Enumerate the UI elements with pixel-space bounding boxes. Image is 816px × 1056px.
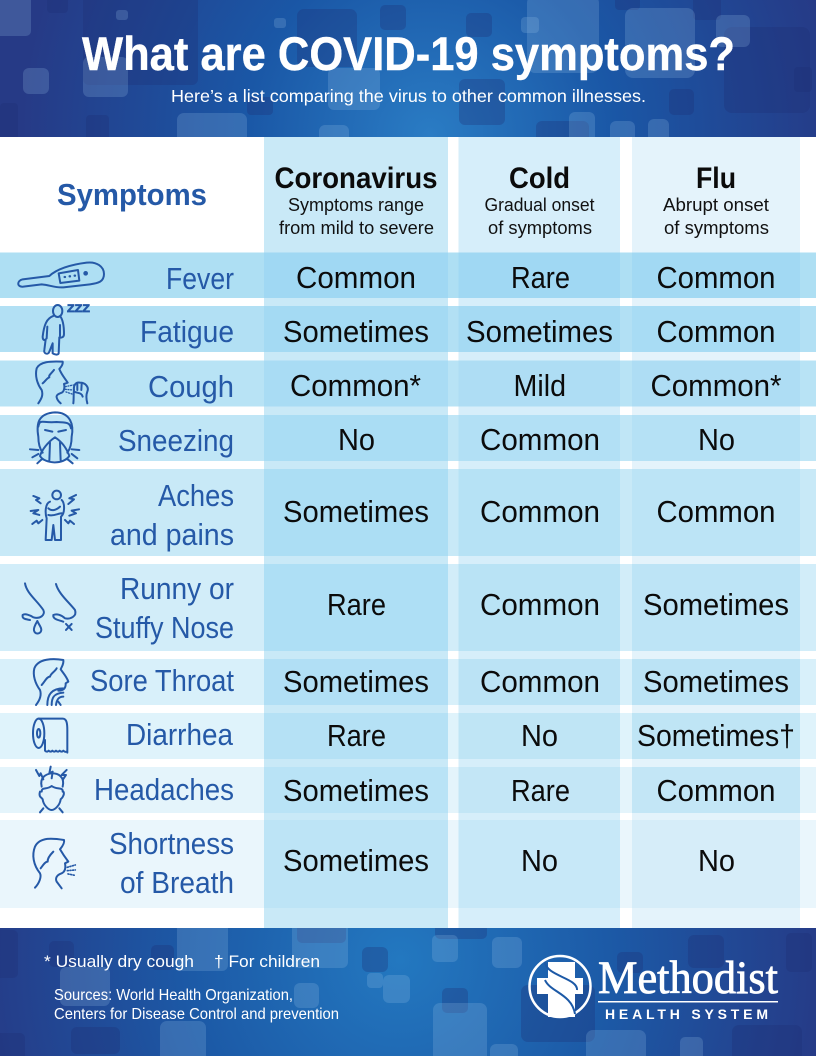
row: Shortness of Breath xyxy=(0,820,816,908)
panel: table header row xyxy=(57,137,800,928)
sources: Sources: World Health Organization, xyxy=(54,987,293,1004)
values: Sneezing: No xyxy=(698,422,735,457)
values: Sneezing: No xyxy=(338,422,375,457)
heading: Flu: of symptoms xyxy=(664,218,769,238)
heading: Flu: Flu xyxy=(696,162,736,195)
row: Fever xyxy=(0,252,816,298)
icon: throat xyxy=(34,659,68,705)
values: Headaches xyxy=(283,773,776,808)
values: Fever: Common xyxy=(656,260,776,295)
values: Shortness of Breath: Sometimes xyxy=(283,843,429,878)
values: Cough: Mild xyxy=(514,368,566,403)
values: Sore Throat xyxy=(283,664,789,699)
label: Shortness of Breath: Shortness xyxy=(109,826,234,861)
label: Aches and pains: Aches xyxy=(158,478,234,513)
values: Headaches: Common xyxy=(656,773,776,808)
heading: Coronavirus: Coronavirus xyxy=(274,162,438,195)
icon: toilet roll xyxy=(33,719,67,753)
values: Diarrhea: Rare xyxy=(327,718,386,753)
label: Aches and pains: and pains xyxy=(110,517,234,552)
icon: sneezing face xyxy=(30,412,79,463)
footnotes xyxy=(44,952,320,971)
values: Cough: Common* xyxy=(290,368,421,403)
icon: headache xyxy=(36,767,67,812)
values: Fever xyxy=(296,260,776,295)
label: Sore Throat: Sore Throat xyxy=(90,663,234,698)
values: Diarrhea xyxy=(327,718,795,753)
heading: Cold: Cold xyxy=(509,162,570,195)
label: Fever: Fever xyxy=(166,261,234,296)
footnotes: * Usually dry cough xyxy=(44,952,194,971)
sources: Centers for Disease Control and prevention xyxy=(54,1006,339,1023)
row: Sneezing xyxy=(0,412,816,463)
values: Aches and pains: Sometimes xyxy=(283,494,429,529)
values: Cough xyxy=(290,368,782,403)
values: Headaches: Sometimes xyxy=(283,773,429,808)
icon: thermometer xyxy=(18,262,104,287)
values: Sore Throat: Sometimes xyxy=(643,664,789,699)
heading: Coronavirus: from mild to severe xyxy=(279,218,434,238)
label: Runny or Stuffy Nose xyxy=(95,571,234,645)
values: Shortness of Breath: No xyxy=(698,843,735,878)
label: Shortness of Breath: of Breath xyxy=(120,865,234,900)
heading: Cold: of symptoms xyxy=(488,218,592,238)
values: Sneezing: Common xyxy=(480,422,600,457)
row: Fatigue xyxy=(0,303,816,355)
row: Cough xyxy=(0,360,816,406)
values: Cough: Common* xyxy=(650,368,782,403)
values: Diarrhea: Sometimes† xyxy=(637,718,795,753)
values: Headaches: Rare xyxy=(511,773,570,808)
footnotes: † For children xyxy=(214,952,320,971)
label: Headaches: Headaches xyxy=(94,772,234,807)
icon: person with aches xyxy=(31,491,79,540)
values: Sore Throat: Common xyxy=(480,664,600,699)
values: Runny or Stuffy Nose xyxy=(327,587,789,622)
panel: header banner xyxy=(0,0,816,151)
values: Fatigue xyxy=(283,314,776,349)
values: Aches and pains: Common xyxy=(656,494,776,529)
values: Shortness of Breath: No xyxy=(521,843,558,878)
values: Sore Throat: Sometimes xyxy=(283,664,429,699)
title: What are COVID-19 symptoms? xyxy=(82,27,735,80)
values: Fatigue: Common xyxy=(656,314,776,349)
row: Diarrhea xyxy=(0,713,816,759)
logo: Methodist Health System: HEALTH SYSTEM xyxy=(605,1006,768,1022)
values: Diarrhea: No xyxy=(521,718,558,753)
values: Fever: Common xyxy=(296,260,416,295)
row: Aches and pains xyxy=(0,469,816,556)
values: Fatigue: Sometimes xyxy=(283,314,429,349)
values: Fatigue: Sometimes xyxy=(466,314,613,349)
heading: Cold xyxy=(484,162,594,238)
icon: breath xyxy=(33,839,75,888)
subtitle: Here’s a list comparing the virus to other common illnesses. xyxy=(171,86,646,106)
values: Aches and pains: Common xyxy=(480,494,600,529)
values: Aches and pains xyxy=(283,494,776,529)
values: Runny or Stuffy Nose: Rare xyxy=(327,587,386,622)
heading: Coronavirus xyxy=(274,162,438,238)
panel: footer banner xyxy=(0,920,816,1056)
label: Diarrhea: Diarrhea xyxy=(126,717,234,752)
values: Sneezing xyxy=(338,422,735,457)
row: Headaches xyxy=(0,767,816,813)
values: Shortness of Breath xyxy=(283,843,735,878)
heading: Flu: Abrupt onset xyxy=(663,195,769,215)
label: Fatigue: Fatigue xyxy=(140,314,234,349)
label: Sneezing: Sneezing xyxy=(118,423,234,458)
heading: Flu xyxy=(663,162,769,238)
logo: Methodist Health System xyxy=(530,952,778,1022)
row: Runny or Stuffy Nose xyxy=(0,564,816,651)
icon: noses xyxy=(23,583,75,633)
logo: Methodist Health System: Methodist xyxy=(598,952,778,1004)
sources xyxy=(54,987,339,1023)
label: Cough: Cough xyxy=(148,369,234,404)
icon: tired person: ZZZ xyxy=(67,303,90,315)
label: Runny or Stuffy Nose: Runny or xyxy=(120,571,234,606)
heading: Cold: Gradual onset xyxy=(484,195,594,215)
icon: tired person xyxy=(43,303,90,355)
values: Runny or Stuffy Nose: Common xyxy=(480,587,600,622)
values: Fever: Rare xyxy=(511,260,570,295)
label: Aches and pains xyxy=(110,478,234,552)
heading: Symptoms: Symptoms xyxy=(57,177,207,212)
label: Runny or Stuffy Nose: Stuffy Nose xyxy=(95,610,234,645)
icon: coughing head xyxy=(36,361,88,403)
label: Shortness of Breath xyxy=(109,826,234,900)
heading: Coronavirus: Symptoms range xyxy=(288,195,424,215)
values: Runny or Stuffy Nose: Sometimes xyxy=(643,587,789,622)
row: Sore Throat xyxy=(0,659,816,705)
